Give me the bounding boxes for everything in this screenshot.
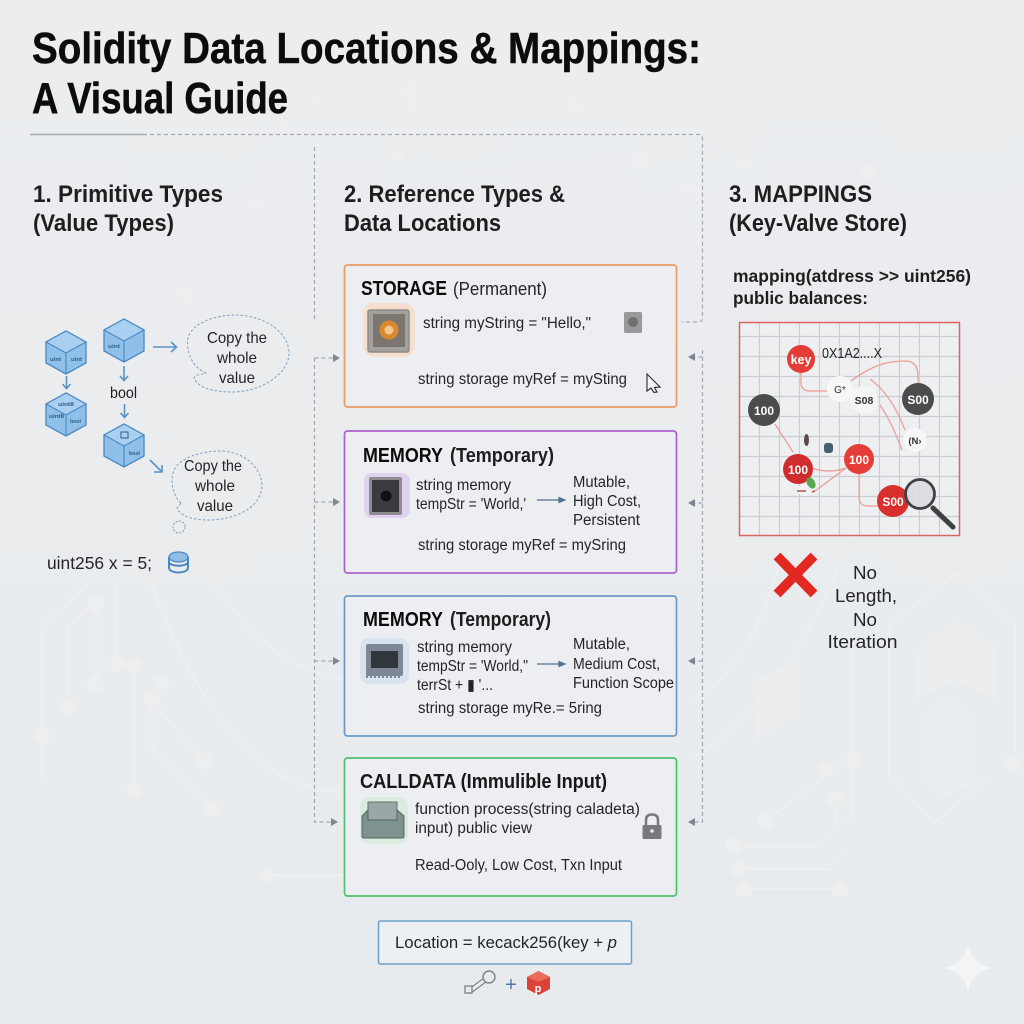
properties: Medium Cost, [573,656,660,673]
icon: lock [642,814,662,839]
icon: cube lower left: bool [70,419,82,425]
properties [573,636,674,692]
panel: memory blue [344,596,676,736]
arrows between cubes [62,342,176,472]
icon: red cube p: p [535,983,542,995]
properties: High Cost, [573,493,641,510]
node: key [787,345,815,373]
icon: key wrench [465,971,495,993]
right connector with arrows [688,350,702,826]
panel: memory purple [344,431,676,573]
heading: reference types: Data Locations [344,210,501,237]
icon: cursor [647,374,660,392]
icon: cube uint left [46,331,86,374]
text: no length no iteration: No [853,563,877,583]
address label: 0X1A2....X [822,346,882,362]
heading: storage [361,278,547,300]
code: function: function process(string caladeta) [415,801,640,818]
code: string memory [416,477,526,513]
node: hash [827,376,853,402]
node: red 100 left [783,454,813,484]
node: hash: G* [834,385,846,396]
heading: memory temporary: (Temporary) [450,445,554,467]
code: storage ref: string storage myRe.= 5ring [418,700,602,717]
icon: drive [624,312,642,333]
panel: calldata [344,758,676,896]
label: bool: bool [110,385,137,402]
code: string myString: string myString = "Hello," [423,315,591,332]
title [32,24,701,123]
node: white: (N› [908,436,922,447]
node: red 100 right [844,444,874,474]
arrow [537,498,565,502]
callout: copy the whole value top: whole [216,350,257,367]
heading: calldata: CALLDATA (Immulible Input) [360,771,607,793]
node: dark 500: S00 [907,393,929,407]
icon: memory drive [364,473,410,518]
node: key: key [791,353,811,367]
properties: Function Scope [573,675,674,692]
icon: cube uint left: uint [50,357,61,363]
mapping signature: mapping(atdress >> uint256) [733,266,971,286]
panel: storage [344,265,676,407]
node: S08 [850,386,878,414]
icon: red cube p [527,971,550,995]
decorative star [944,944,992,992]
callout: copy the whole value top [188,315,289,392]
properties: Mutable, [573,474,630,491]
icon: cube lower left: uint8 [49,414,64,420]
title: A Visual Guide [32,74,288,123]
icon: cube bool [104,424,144,467]
text: no length no iteration: No [853,610,877,630]
heading: mappings: 3. MAPPINGS [729,181,872,208]
left connector with arrows [314,354,340,826]
properties [573,474,641,529]
properties: Persistent [573,512,641,529]
icon: cube uint top [104,319,144,362]
heading: primitive types: (Value Types) [33,210,174,237]
heading: memory temporary [363,609,551,631]
node: dark 100: 100 [754,404,774,418]
icon: safe [363,303,415,357]
text: no length no iteration [828,563,898,652]
properties: Read-Ooly, Low Cost, Txn Input [415,857,623,874]
heading: storage: (Permanent) [453,279,547,299]
panel: primitive types diagram [46,315,289,573]
node: dark 100 [748,394,780,426]
icon: database [169,552,188,572]
mapping signature: public balances: [733,288,868,308]
icon: cube lower left: uint8 [58,402,74,408]
code: string memory: string memory [417,639,512,656]
properties: Mutable, [573,636,630,653]
node: dark 500 [902,383,934,415]
callout: copy the whole value bottom: value [197,498,233,515]
node: red 500: S00 [882,495,904,509]
node: red 500 [877,485,909,517]
mapping grid diagram [740,322,960,536]
callout: copy the whole value top: Copy the [207,330,267,347]
heading: memory temporary [363,445,554,467]
icon: cube bool: bool [129,451,141,457]
code: storage ref: string storage myRef = mySring [418,537,626,554]
heading: reference types [344,181,565,237]
mapping signature [733,266,971,308]
links [775,361,918,506]
title: Solidity Data Locations & Mappings: [32,24,701,73]
code: uint256: uint256 x = 5; [47,553,152,573]
icon: cube uint left: uint [71,357,82,363]
code: function: input) public view [415,820,533,837]
plus sign: + [505,974,517,996]
code: string memory [417,639,528,694]
node: red 100 left: 100 [788,463,808,477]
callout: copy the whole value top: value [219,370,255,387]
node: red 100 right: 100 [849,453,869,467]
title rule and top connector [30,134,702,322]
heading: memory temporary: MEMORY [363,445,444,467]
heading: memory temporary: MEMORY [363,609,444,631]
icon: cube lower left [46,393,86,436]
code: function [415,801,640,837]
text: no length no iteration: Length, [835,586,897,606]
icon: magnifier [906,480,953,527]
text: no length no iteration: Iteration [828,632,898,652]
formula box: Location = kecack256(key + p [395,934,617,952]
icon: cube uint top: uint [108,344,120,350]
node: white [903,428,927,452]
heading: storage: STORAGE [361,278,447,300]
heading: mappings [729,181,907,237]
icon: chip [360,638,409,684]
callout: copy the whole value bottom: Copy the [184,458,242,475]
code: storage ref: string storage myRef = mySting [418,371,627,388]
code: string memory: string memory [416,477,511,494]
formula box [378,921,632,964]
icon: red cross [777,556,814,594]
heading: primitive types: 1. Primitive Types [33,181,223,208]
code: string memory: tempStr = 'World,' [416,496,526,513]
heading: memory temporary: (Temporary) [450,609,551,631]
code: string memory: tempStr = 'World," [417,658,528,675]
arrow [537,662,565,666]
code: string memory: terrSt + ▮ '... [417,677,493,694]
heading: mappings: (Key-Valve Store) [729,210,907,237]
node: S08: S08 [855,395,873,407]
callout: copy the whole value bottom: whole [194,478,235,495]
icon: inbox tray [360,797,408,844]
heading: reference types: 2. Reference Types & [344,181,565,208]
heading: primitive types [33,181,223,237]
callout: copy the whole value bottom [172,451,262,533]
small artifacts [797,434,833,496]
